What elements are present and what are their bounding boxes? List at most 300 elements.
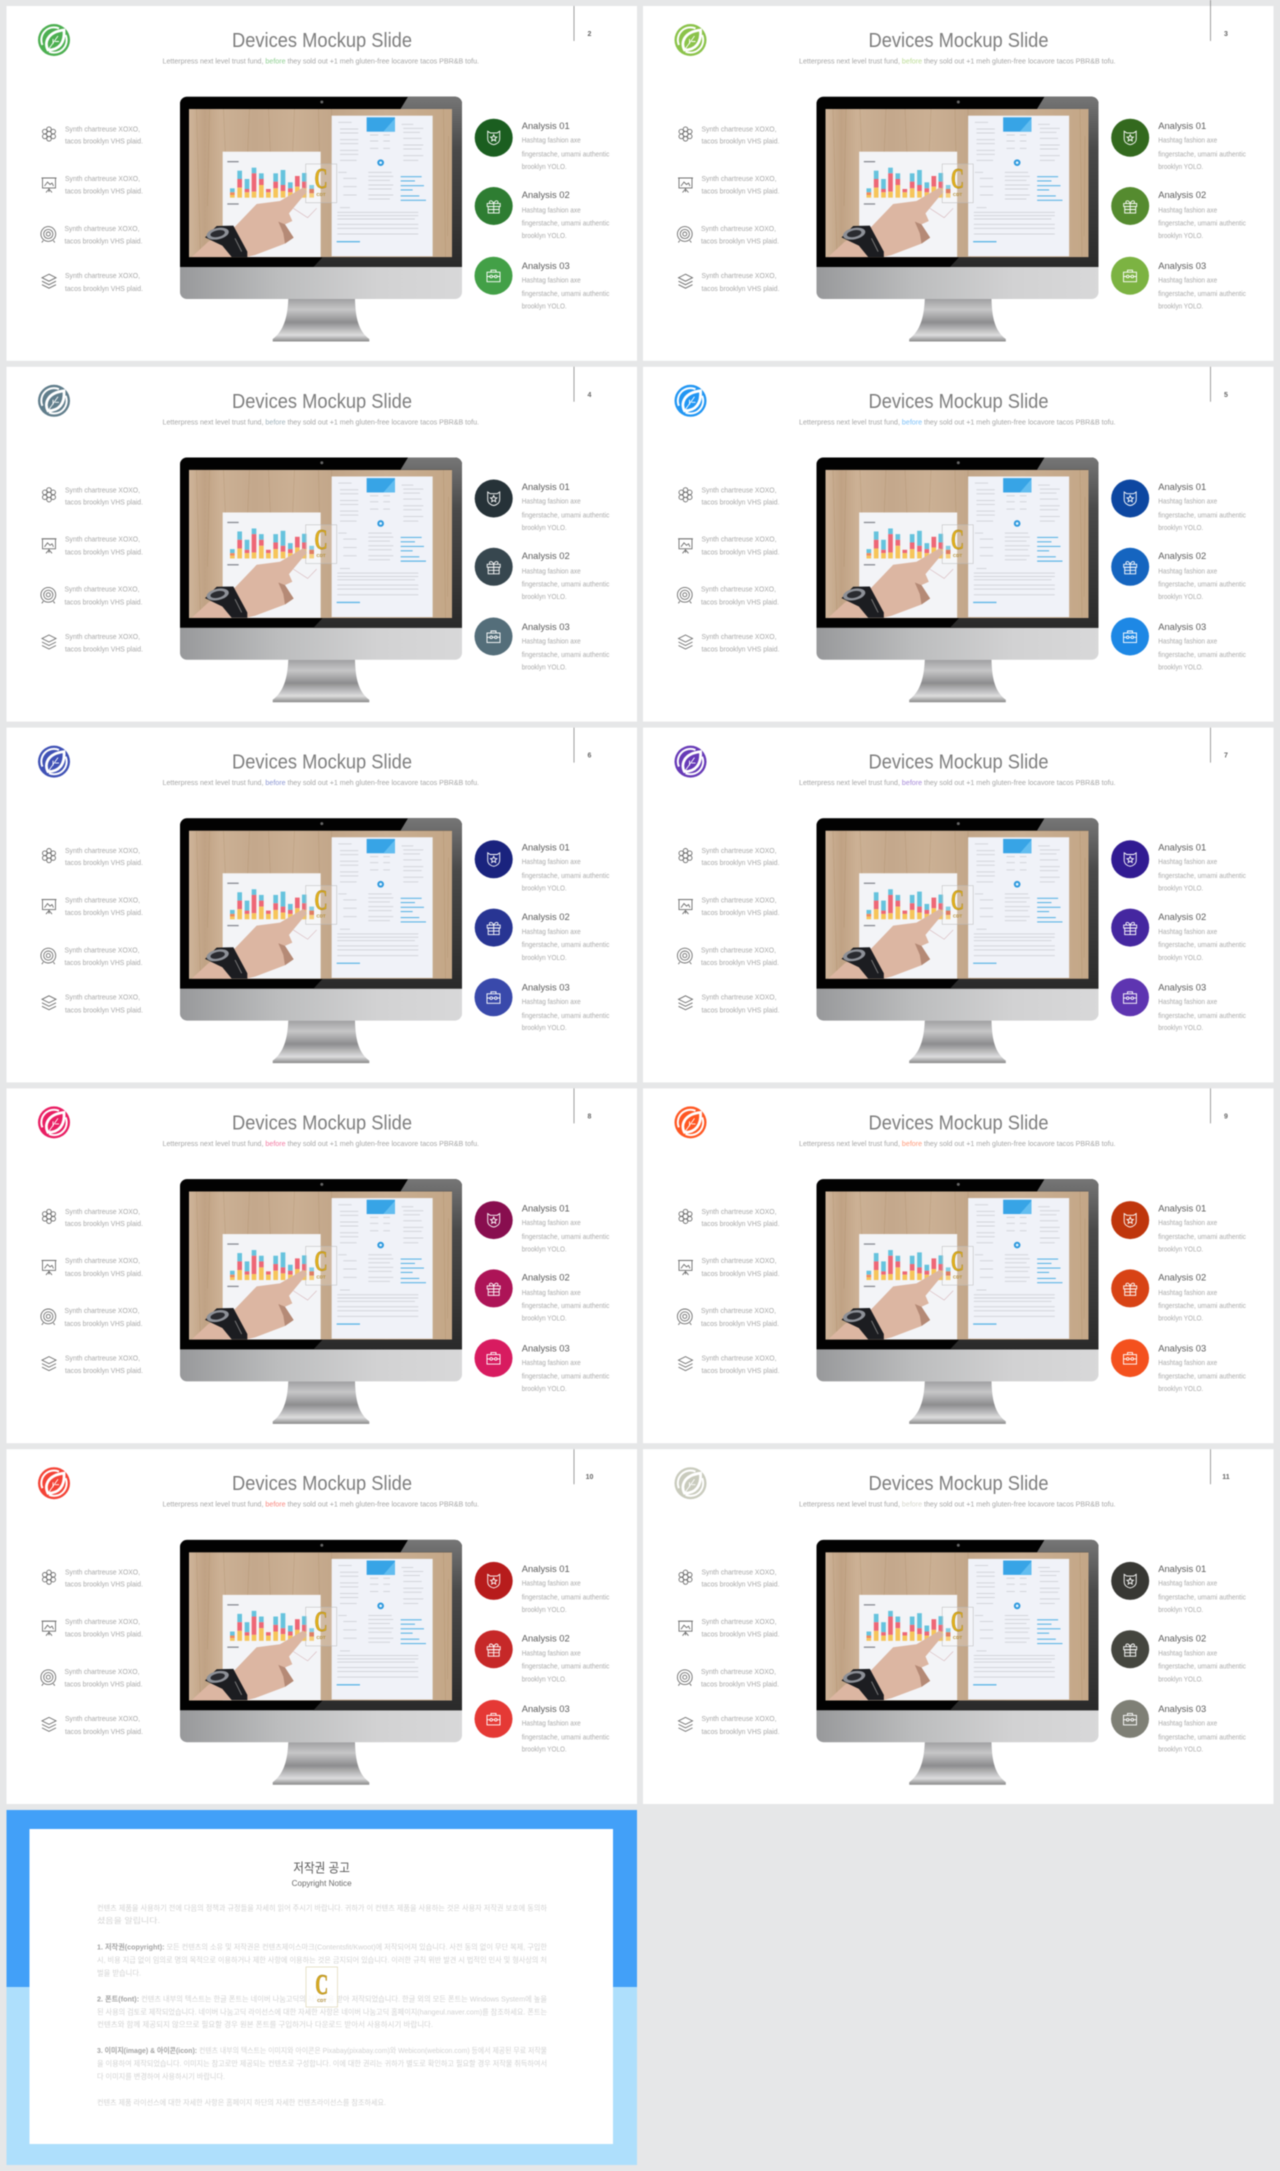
analysis 01 xyxy=(475,119,610,171)
analysis 01: fingerstache, umami authentic xyxy=(1158,1232,1246,1241)
analysis 01: Hashtag fashion axe xyxy=(522,136,581,144)
analysis 03: brooklyn YOLO. xyxy=(1158,662,1203,671)
analysis 03: Hashtag fashion axe xyxy=(522,636,581,645)
page number xyxy=(574,367,592,402)
left item 3: Synth chartreuse XOXO, xyxy=(701,585,776,594)
analysis 03 xyxy=(1111,257,1246,310)
left item 1: tacos brooklyn VHS plaid. xyxy=(702,136,780,146)
left item 2 xyxy=(42,895,143,917)
analysis 01: Analysis 01 xyxy=(522,843,570,854)
left item 4: Synth chartreuse XOXO, xyxy=(702,993,776,1002)
analysis 01: Hashtag fashion axe xyxy=(1158,136,1217,144)
left item 2: tacos brooklyn VHS plaid. xyxy=(702,908,780,917)
left item 3: tacos brooklyn VHS plaid. xyxy=(701,236,779,246)
page number: 10 xyxy=(586,1474,593,1481)
analysis 02: brooklyn YOLO. xyxy=(522,592,567,601)
left item 4: tacos brooklyn VHS plaid. xyxy=(702,1005,780,1014)
analysis 01: Analysis 01 xyxy=(1158,843,1206,854)
analysis 02: brooklyn YOLO. xyxy=(1158,592,1203,601)
page number xyxy=(574,1088,592,1123)
logo xyxy=(674,1467,706,1499)
left item 1: tacos brooklyn VHS plaid. xyxy=(702,858,780,867)
analysis 03 xyxy=(1111,978,1246,1032)
left item 2 xyxy=(42,535,143,556)
left item 4 xyxy=(678,993,780,1014)
left item 2: Synth chartreuse XOXO, xyxy=(702,895,776,904)
left item 4 xyxy=(678,1714,780,1736)
analysis 01: Hashtag fashion axe xyxy=(522,857,581,866)
left item 1: Synth chartreuse XOXO, xyxy=(702,846,776,855)
left item 3: Synth chartreuse XOXO, xyxy=(701,224,776,233)
analysis 03: brooklyn YOLO. xyxy=(1158,1745,1203,1754)
analysis 03: brooklyn YOLO. xyxy=(522,662,567,671)
left item 1: Synth chartreuse XOXO, xyxy=(65,1568,140,1577)
copyright section 1: 벌을 받습니다. xyxy=(97,1968,141,1978)
analysis 02: Analysis 02 xyxy=(1158,1633,1206,1644)
analysis 01: brooklyn YOLO. xyxy=(1158,1244,1203,1253)
analysis 01 xyxy=(1111,1201,1246,1253)
panel: copyright notice xyxy=(6,1810,637,2165)
left item 1 xyxy=(679,124,780,146)
left item 3: tacos brooklyn VHS plaid. xyxy=(701,1680,779,1689)
analysis 02: Hashtag fashion axe xyxy=(1158,1288,1217,1297)
right analysis list xyxy=(474,480,610,671)
left item 2: tacos brooklyn VHS plaid. xyxy=(65,1630,143,1639)
analysis 02 xyxy=(475,1269,610,1323)
analysis 03: Analysis 03 xyxy=(1158,261,1206,272)
analysis 02: brooklyn YOLO. xyxy=(522,953,567,962)
left item 4 xyxy=(678,632,780,654)
analysis 02 xyxy=(475,187,610,240)
left item 3: Synth chartreuse XOXO, xyxy=(701,1306,776,1315)
analysis 02: Analysis 02 xyxy=(522,190,570,201)
analysis 03: fingerstache, umami authentic xyxy=(1158,1372,1246,1381)
left item 4 xyxy=(42,632,143,654)
right analysis list xyxy=(1111,840,1246,1032)
right analysis list xyxy=(1111,119,1246,310)
title: Devices Mockup Slide xyxy=(232,1111,412,1134)
analysis 02: Hashtag fashion axe xyxy=(522,566,581,575)
left item 2: Synth chartreuse XOXO, xyxy=(65,174,140,183)
left item 2 xyxy=(678,895,780,917)
analysis 02: fingerstache, umami authentic xyxy=(522,218,610,228)
right analysis list xyxy=(474,119,610,310)
analysis 03 xyxy=(1111,1339,1246,1393)
copyright section 1: 시, 비용 지급 없이 임의로 명의 목적으로 이용하거나 제한 사항에 이용하는 것은 금지되어 있습니다. 이러한 규칙 위반 발견 시 법적인 민사 및 형사상의 처 xyxy=(97,1956,547,1964)
slide 11 neutral xyxy=(643,1449,1274,1804)
logo xyxy=(674,746,706,778)
monitor mockup xyxy=(816,97,1098,342)
analysis 02: Analysis 02 xyxy=(522,912,570,923)
analysis 02: Analysis 02 xyxy=(1158,912,1206,923)
analysis 01: Hashtag fashion axe xyxy=(1158,496,1217,505)
left item 1: tacos brooklyn VHS plaid. xyxy=(702,497,780,506)
left item 3: Synth chartreuse XOXO, xyxy=(64,585,140,594)
analysis 02: brooklyn YOLO. xyxy=(522,1314,567,1323)
page number: 5 xyxy=(1224,392,1228,399)
left item 3 xyxy=(41,1306,143,1328)
analysis 03: fingerstache, umami authentic xyxy=(1158,1011,1246,1020)
left item 1 xyxy=(679,485,780,506)
analysis 03: fingerstache, umami authentic xyxy=(522,1732,610,1741)
copyright section 1 xyxy=(97,1942,547,1978)
analysis 03: fingerstache, umami authentic xyxy=(1158,1732,1246,1741)
analysis 02 xyxy=(1111,187,1246,240)
subtitle: Letterpress next level trust fund, before they sold out +1 meh gluten-free locavore tacos PBR&B tofu. xyxy=(162,417,479,426)
left item 1: Synth chartreuse XOXO, xyxy=(702,485,776,494)
analysis 03: brooklyn YOLO. xyxy=(522,302,567,310)
page number xyxy=(1210,367,1228,402)
analysis 02 xyxy=(475,909,610,962)
monitor mockup xyxy=(816,1179,1098,1424)
analysis 03: brooklyn YOLO. xyxy=(1158,302,1203,310)
left item 4: tacos brooklyn VHS plaid. xyxy=(702,284,780,293)
left item 2: tacos brooklyn VHS plaid. xyxy=(702,547,780,556)
analysis 01: brooklyn YOLO. xyxy=(522,1605,567,1614)
left item 4: Synth chartreuse XOXO, xyxy=(65,1353,140,1362)
left item 4: Synth chartreuse XOXO, xyxy=(702,1353,776,1362)
analysis 01: fingerstache, umami authentic xyxy=(522,510,610,519)
left list xyxy=(677,846,780,1014)
analysis 03: Analysis 03 xyxy=(1158,622,1206,633)
left list xyxy=(677,124,780,293)
analysis 03 xyxy=(474,978,610,1032)
left item 2: Synth chartreuse XOXO, xyxy=(65,1256,140,1265)
analysis 01: brooklyn YOLO. xyxy=(522,162,567,171)
left item 1: Synth chartreuse XOXO, xyxy=(65,485,140,494)
copyright heading: 저작권 공고 xyxy=(293,1860,350,1876)
subtitle: Letterpress next level trust fund, before they sold out +1 meh gluten-free locavore tacos PBR&B tofu. xyxy=(799,1500,1116,1509)
left item 2: tacos brooklyn VHS plaid. xyxy=(702,1630,780,1639)
left item 1: tacos brooklyn VHS plaid. xyxy=(65,858,143,867)
analysis 02: fingerstache, umami authentic xyxy=(522,940,610,949)
left list xyxy=(41,1568,143,1736)
page number xyxy=(574,6,592,41)
left item 1 xyxy=(42,1207,143,1228)
left item 4 xyxy=(42,271,143,293)
monitor mockup xyxy=(180,97,462,342)
analysis 03 xyxy=(474,618,610,671)
slide 8 pink xyxy=(6,1088,637,1443)
left item 4: Synth chartreuse XOXO, xyxy=(65,632,140,641)
analysis 02: brooklyn YOLO. xyxy=(1158,231,1203,240)
analysis 01: fingerstache, umami authentic xyxy=(1158,510,1246,519)
left item 2: Synth chartreuse XOXO, xyxy=(702,174,776,183)
analysis 01: fingerstache, umami authentic xyxy=(522,150,610,158)
analysis 01 xyxy=(475,840,610,893)
analysis 01 xyxy=(1111,1562,1246,1614)
left item 1 xyxy=(679,1568,780,1589)
logo xyxy=(674,24,706,56)
analysis 01: fingerstache, umami authentic xyxy=(1158,1593,1246,1602)
page number: 4 xyxy=(588,392,592,399)
left item 3: Synth chartreuse XOXO, xyxy=(64,224,140,233)
analysis 01: Analysis 01 xyxy=(1158,121,1206,132)
analysis 01: brooklyn YOLO. xyxy=(1158,884,1203,893)
analysis 03: fingerstache, umami authentic xyxy=(1158,650,1246,659)
subtitle: Letterpress next level trust fund, before they sold out +1 meh gluten-free locavore tacos PBR&B tofu. xyxy=(162,1139,479,1148)
page number: 3 xyxy=(1224,31,1228,38)
logo xyxy=(674,1106,706,1138)
analysis 03: brooklyn YOLO. xyxy=(522,1745,567,1754)
page number xyxy=(1210,1088,1228,1123)
left item 4: Synth chartreuse XOXO, xyxy=(65,271,140,280)
page number: 11 xyxy=(1222,1474,1230,1481)
analysis 03: Hashtag fashion axe xyxy=(1158,1719,1217,1728)
analysis 02: fingerstache, umami authentic xyxy=(1158,218,1246,228)
analysis 01 xyxy=(1111,480,1246,532)
analysis 01: Hashtag fashion axe xyxy=(1158,1579,1217,1588)
analysis 02: Analysis 02 xyxy=(522,1273,570,1284)
analysis 01: brooklyn YOLO. xyxy=(1158,523,1203,532)
analysis 03: brooklyn YOLO. xyxy=(522,1384,567,1393)
copyright section 3: 3. 이미지(image) & 아이콘(icon): 컨텐츠 내부의 텍스트는 이미지와 아이콘은 Pixabay(pixabay.com)와 Webicon(webicon.com) 등에서 제공된 무료 저작물 xyxy=(97,2046,547,2055)
title: Devices Mockup Slide xyxy=(868,1111,1048,1134)
right analysis list xyxy=(474,1562,610,1754)
title: Devices Mockup Slide xyxy=(232,390,412,413)
subtitle: Letterpress next level trust fund, before they sold out +1 meh gluten-free locavore tacos PBR&B tofu. xyxy=(162,1500,479,1509)
analysis 01: brooklyn YOLO. xyxy=(522,1244,567,1253)
analysis 02: Analysis 02 xyxy=(1158,190,1206,201)
title: Devices Mockup Slide xyxy=(232,1472,412,1495)
left item 1: Synth chartreuse XOXO, xyxy=(65,846,140,855)
slide 10 red xyxy=(6,1449,637,1804)
analysis 02: Hashtag fashion axe xyxy=(522,1649,581,1658)
analysis 02: brooklyn YOLO. xyxy=(1158,953,1203,962)
title: Devices Mockup Slide xyxy=(232,751,412,774)
analysis 03: Hashtag fashion axe xyxy=(1158,1358,1217,1367)
analysis 03: fingerstache, umami authentic xyxy=(522,289,610,298)
left item 2: Synth chartreuse XOXO, xyxy=(702,1617,776,1626)
analysis 01: fingerstache, umami authentic xyxy=(1158,150,1246,158)
analysis 02: Hashtag fashion axe xyxy=(522,1288,581,1297)
analysis 03: Analysis 03 xyxy=(1158,983,1206,994)
subtitle: Letterpress next level trust fund, before they sold out +1 meh gluten-free locavore tacos PBR&B tofu. xyxy=(799,778,1116,787)
page number xyxy=(574,728,592,763)
left item 2 xyxy=(42,174,143,196)
analysis 01: brooklyn YOLO. xyxy=(522,884,567,893)
left item 3 xyxy=(41,1667,143,1689)
left item 4: tacos brooklyn VHS plaid. xyxy=(702,1366,780,1375)
copyright section 2: 컨텐츠와 함께 제공되지 않으므로 필요할 경우 원본 폰트를 구입하거나 다운로드 받아서 사용하시기 바랍니다. xyxy=(97,2020,433,2029)
title: Devices Mockup Slide xyxy=(868,390,1048,413)
left list xyxy=(41,846,143,1014)
analysis 02: Hashtag fashion axe xyxy=(1158,1649,1217,1658)
left item 3: tacos brooklyn VHS plaid. xyxy=(701,1319,779,1328)
monitor mockup xyxy=(180,1540,462,1785)
left item 4: Synth chartreuse XOXO, xyxy=(702,632,776,641)
left item 2: tacos brooklyn VHS plaid. xyxy=(65,1269,143,1278)
left item 1: tacos brooklyn VHS plaid. xyxy=(702,1219,780,1228)
left item 2: tacos brooklyn VHS plaid. xyxy=(65,186,143,196)
analysis 01: Analysis 01 xyxy=(522,482,570,493)
right analysis list xyxy=(1111,480,1246,671)
left item 4: Synth chartreuse XOXO, xyxy=(702,1714,776,1723)
logo xyxy=(38,746,70,778)
page number xyxy=(1210,1449,1230,1484)
analysis 02: Analysis 02 xyxy=(1158,1273,1206,1284)
left item 3 xyxy=(41,585,143,606)
analysis 03: Analysis 03 xyxy=(522,622,570,633)
logo xyxy=(38,24,70,56)
left item 1: tacos brooklyn VHS plaid. xyxy=(702,1580,780,1589)
analysis 03: brooklyn YOLO. xyxy=(1158,1023,1203,1032)
analysis 01 xyxy=(475,1562,610,1614)
analysis 01: Analysis 01 xyxy=(522,121,570,132)
left list xyxy=(41,1207,143,1375)
left item 1: Synth chartreuse XOXO, xyxy=(702,124,776,134)
left item 4: tacos brooklyn VHS plaid. xyxy=(65,1005,143,1014)
left item 3: Synth chartreuse XOXO, xyxy=(701,945,776,954)
left item 1: Synth chartreuse XOXO, xyxy=(65,1207,140,1216)
analysis 03: Hashtag fashion axe xyxy=(1158,276,1217,284)
left item 2: tacos brooklyn VHS plaid. xyxy=(65,547,143,556)
right analysis list xyxy=(474,1201,610,1393)
left item 2 xyxy=(678,535,780,556)
analysis 01: fingerstache, umami authentic xyxy=(522,1593,610,1602)
left item 2 xyxy=(42,1256,143,1278)
analysis 03 xyxy=(1111,1700,1246,1754)
left item 3 xyxy=(41,945,143,967)
copyright section 2: 된 사용의 검토로 제작되었습니다. 네이버 나눔고딕 라이선스에 대한 자세한 사항은 네이버 나눔고딕 홈페이지(hangeul.naver.com)를 참조하세요. 폰트는 xyxy=(97,2008,547,2017)
analysis 03 xyxy=(474,1339,610,1393)
left item 4 xyxy=(42,1714,143,1736)
analysis 03: Analysis 03 xyxy=(522,1704,570,1715)
left item 3 xyxy=(677,585,779,606)
analysis 03: Hashtag fashion axe xyxy=(522,1719,581,1728)
left item 2 xyxy=(678,1617,780,1639)
left item 3: Synth chartreuse XOXO, xyxy=(64,1306,140,1315)
analysis 03: Hashtag fashion axe xyxy=(522,997,581,1006)
monitor mockup xyxy=(180,818,462,1063)
slide 6 indigo xyxy=(6,728,637,1082)
left item 2: Synth chartreuse XOXO, xyxy=(65,535,140,544)
page number: 7 xyxy=(1224,753,1228,760)
left item 4: tacos brooklyn VHS plaid. xyxy=(702,1727,780,1736)
analysis 02: Analysis 02 xyxy=(522,551,570,562)
subtitle: Letterpress next level trust fund, before they sold out +1 meh gluten-free locavore tacos PBR&B tofu. xyxy=(799,56,1116,66)
page number: 6 xyxy=(588,753,592,760)
copyright subheading: Copyright Notice xyxy=(292,1879,352,1888)
left item 4: Synth chartreuse XOXO, xyxy=(65,1714,140,1723)
copyright section 2: 2. 폰트(font): 컨텐츠 내부의 텍스트는 한글 폰트는 네이버 나눔고딕의 저작권을 받아 저작되었습니다. 한글 외의 모든 폰트는 Windows System에 높을 xyxy=(97,1994,547,2004)
right analysis list xyxy=(474,840,610,1032)
left item 4 xyxy=(678,271,780,293)
monitor mockup xyxy=(816,1540,1098,1785)
analysis 01: Hashtag fashion axe xyxy=(1158,857,1217,866)
left list xyxy=(41,124,143,293)
copyright section 2 xyxy=(97,1994,547,2029)
analysis 01: Analysis 01 xyxy=(1158,1203,1206,1214)
copyright watermark: CDT xyxy=(317,1998,327,2003)
left list xyxy=(677,1207,780,1375)
analysis 01 xyxy=(1111,840,1246,893)
analysis 01: brooklyn YOLO. xyxy=(1158,162,1203,171)
left item 2: tacos brooklyn VHS plaid. xyxy=(702,186,780,196)
left item 4: tacos brooklyn VHS plaid. xyxy=(65,284,143,293)
analysis 02: Hashtag fashion axe xyxy=(1158,206,1217,214)
copyright section 3 xyxy=(97,2046,547,2081)
left item 3: tacos brooklyn VHS plaid. xyxy=(64,958,142,967)
analysis 02: fingerstache, umami authentic xyxy=(1158,940,1246,949)
copyright watermark xyxy=(306,1967,338,2007)
analysis 02: Analysis 02 xyxy=(522,1633,570,1644)
analysis 03: fingerstache, umami authentic xyxy=(522,1011,610,1020)
analysis 02: brooklyn YOLO. xyxy=(522,231,567,240)
analysis 01 xyxy=(475,480,610,532)
analysis 02: fingerstache, umami authentic xyxy=(522,579,610,588)
analysis 03: Hashtag fashion axe xyxy=(1158,636,1217,645)
left item 2: tacos brooklyn VHS plaid. xyxy=(65,908,143,917)
analysis 02 xyxy=(1111,909,1246,962)
left item 4: tacos brooklyn VHS plaid. xyxy=(65,1366,143,1375)
copyright section 3: 을 이용하여 제작되었습니다. 이미지는 참고로만 제공되는 컨텐츠로 구성합니다. 이에 대한 권리는 귀하가 별도로 확인하고 필요할 경우 저작물 취득하여서 xyxy=(97,2059,547,2068)
left item 1 xyxy=(42,124,143,146)
analysis 03: Hashtag fashion axe xyxy=(522,276,581,284)
analysis 01: brooklyn YOLO. xyxy=(1158,1605,1203,1614)
analysis 03: Analysis 03 xyxy=(522,261,570,272)
logo xyxy=(38,1106,70,1138)
analysis 01: Analysis 01 xyxy=(1158,1564,1206,1575)
analysis 03 xyxy=(1111,618,1246,671)
analysis 01 xyxy=(1111,119,1246,171)
analysis 03: Analysis 03 xyxy=(522,983,570,994)
page number xyxy=(1210,0,1228,41)
left item 2: Synth chartreuse XOXO, xyxy=(702,1256,776,1265)
right analysis list xyxy=(1111,1201,1246,1393)
title: Devices Mockup Slide xyxy=(868,29,1048,52)
left item 4: Synth chartreuse XOXO, xyxy=(65,993,140,1002)
page number: 8 xyxy=(588,1113,592,1120)
left item 2 xyxy=(678,1256,780,1278)
logo xyxy=(38,385,70,417)
analysis 02: brooklyn YOLO. xyxy=(1158,1674,1203,1683)
subtitle: Letterpress next level trust fund, before they sold out +1 meh gluten-free locavore tacos PBR&B tofu. xyxy=(162,778,479,787)
left item 4: tacos brooklyn VHS plaid. xyxy=(65,645,143,654)
left item 3 xyxy=(677,224,779,246)
analysis 03 xyxy=(474,1700,610,1754)
left item 3: tacos brooklyn VHS plaid. xyxy=(701,597,779,606)
left item 3 xyxy=(677,945,779,967)
analysis 02: fingerstache, umami authentic xyxy=(1158,579,1246,588)
left item 3: tacos brooklyn VHS plaid. xyxy=(701,958,779,967)
left item 2: Synth chartreuse XOXO, xyxy=(65,895,140,904)
left item 1 xyxy=(679,846,780,867)
left item 3 xyxy=(41,224,143,246)
analysis 02: Hashtag fashion axe xyxy=(1158,566,1217,575)
analysis 03 xyxy=(474,257,610,310)
analysis 01: fingerstache, umami authentic xyxy=(522,1232,610,1241)
logo xyxy=(674,385,706,417)
left item 3: tacos brooklyn VHS plaid. xyxy=(64,1680,142,1689)
left item 3: tacos brooklyn VHS plaid. xyxy=(64,597,142,606)
copyright watermark: C xyxy=(315,1970,328,2001)
left item 1 xyxy=(42,1568,143,1589)
left item 1: tacos brooklyn VHS plaid. xyxy=(65,136,143,146)
analysis 03: fingerstache, umami authentic xyxy=(1158,289,1246,298)
analysis 02: Hashtag fashion axe xyxy=(522,927,581,936)
analysis 01: Hashtag fashion axe xyxy=(1158,1218,1217,1227)
left item 3: Synth chartreuse XOXO, xyxy=(701,1667,776,1676)
analysis 01: Analysis 01 xyxy=(1158,482,1206,493)
left item 1: Synth chartreuse XOXO, xyxy=(702,1207,776,1216)
left item 1: Synth chartreuse XOXO, xyxy=(65,124,140,134)
left item 1: tacos brooklyn VHS plaid. xyxy=(65,1219,143,1228)
title: Devices Mockup Slide xyxy=(868,751,1048,774)
analysis 01: Analysis 01 xyxy=(522,1564,570,1575)
copyright closing line: 컨텐츠 제품 라이선스에 대한 자세한 사항은 홈페이지 하단의 자세한 컨텐츠라이선스를 참조하세요. xyxy=(97,2098,386,2107)
left item 3: tacos brooklyn VHS plaid. xyxy=(64,1319,142,1328)
